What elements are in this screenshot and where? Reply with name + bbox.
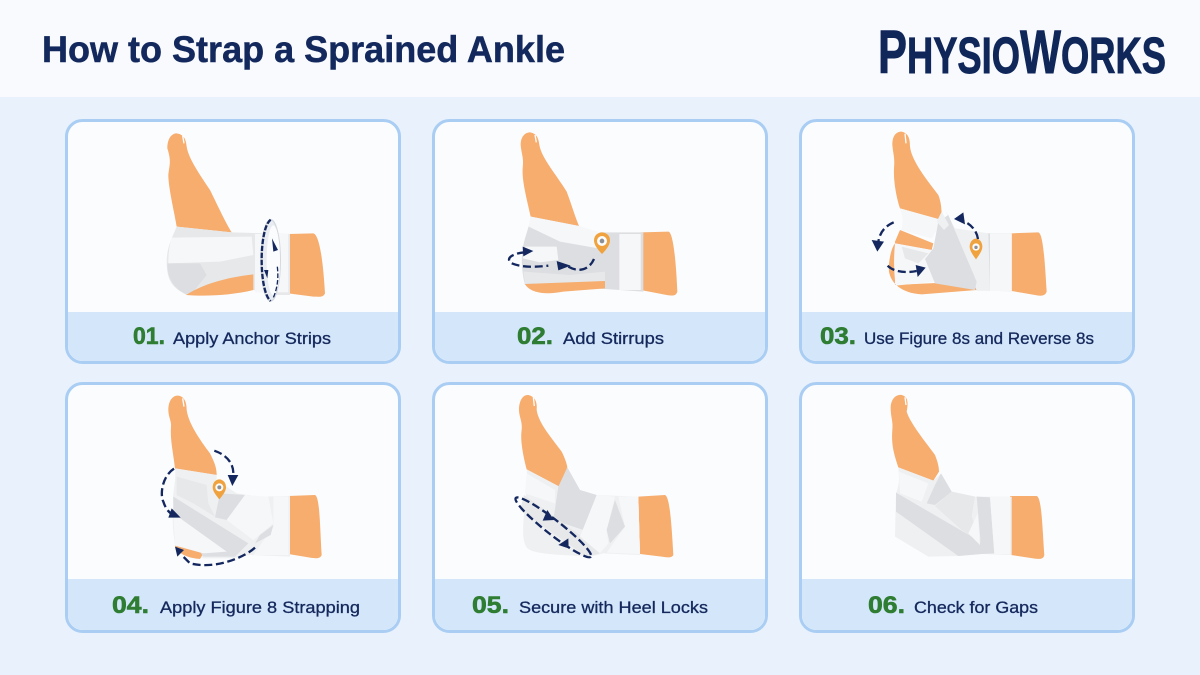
step 5 label: 05. <box>472 592 509 619</box>
step 5 label <box>472 592 708 619</box>
title: How to Strap a Sprained Ankle <box>42 29 565 70</box>
step 3 label <box>820 323 1094 350</box>
arrow: stirrup direction <box>509 247 594 270</box>
step 6 label <box>868 592 1038 619</box>
step 4 label: 04. <box>112 592 149 619</box>
icon: location pin <box>594 232 610 254</box>
step 2 label: Add Stirrups <box>563 329 664 348</box>
step 2 label <box>517 323 664 350</box>
icon: location pin <box>213 479 226 499</box>
step 5 label: Secure with Heel Locks <box>519 598 708 617</box>
panel: step 1 <box>66 120 400 362</box>
step 4 label <box>112 592 360 619</box>
panel: step 3 <box>800 120 1134 362</box>
step 1 label: 01. <box>133 323 165 350</box>
illustration: finished strapping <box>891 395 1044 559</box>
arrow: figure 8 directions <box>872 212 978 277</box>
illustration: foot with figure 8 strapping <box>162 396 322 565</box>
step 4 label: Apply Figure 8 Strapping <box>160 598 360 617</box>
panel: step 4 <box>66 384 400 632</box>
step 3 label: 03. <box>820 323 856 350</box>
arrow: heel lock loop <box>511 492 595 562</box>
arrow: strapping directions <box>162 451 255 565</box>
panel: step 6 <box>800 384 1134 632</box>
panel: step 5 <box>434 384 766 632</box>
step 1 label: Apply Anchor Strips <box>173 329 331 348</box>
step 6 label: 06. <box>868 592 905 619</box>
step 6 label: Check for Gaps <box>914 598 1038 617</box>
illustration: foot with heel locks <box>511 395 673 562</box>
illustration: foot with anchor strips <box>167 133 325 301</box>
panel: step 2 <box>434 120 766 362</box>
step 2 label: 02. <box>517 323 553 350</box>
icon: location pin <box>970 239 982 259</box>
step 1 label <box>133 323 331 350</box>
logo: PhysioWorks: PHYSIOWORKS <box>878 18 1166 86</box>
icon: tape ring <box>261 220 280 301</box>
step 3 label: Use Figure 8s and Reverse 8s <box>864 329 1094 348</box>
illustration: foot with figure 8s <box>872 132 1047 296</box>
illustration: foot with stirrups <box>509 132 677 296</box>
